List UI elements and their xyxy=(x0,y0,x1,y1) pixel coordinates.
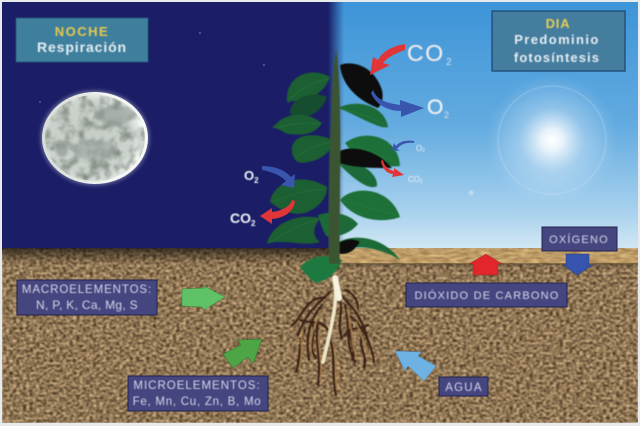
label: oxigeno xyxy=(542,227,617,251)
leaves xyxy=(267,73,400,283)
gas labels: CO xyxy=(230,210,251,226)
gas labels: 2 xyxy=(422,148,425,154)
label: agua: AGUA xyxy=(445,382,483,394)
arrow: dioxido de carbono xyxy=(469,254,502,275)
gas labels: 2 xyxy=(446,57,452,68)
panel: noche: Respiración xyxy=(37,39,127,55)
label: microelementos: MICROELEMENTOS: xyxy=(133,380,261,392)
panel: dia xyxy=(492,11,625,71)
gas arrows: night xyxy=(260,166,295,224)
gas labels: 2 xyxy=(251,219,256,228)
leaf midribs xyxy=(270,79,398,243)
sun xyxy=(468,74,618,206)
label: macroelementos: MACROELEMENTOS: xyxy=(22,284,152,296)
panel: dia: fotosíntesis xyxy=(514,50,600,65)
plant roots xyxy=(292,278,374,395)
label: oxigeno: OXÍGENO xyxy=(549,233,609,246)
label: macroelementos: N, P, K, Ca, Mg, S xyxy=(36,298,138,312)
gas labels: O xyxy=(416,144,422,153)
stem xyxy=(329,50,340,264)
gas labels xyxy=(230,40,452,228)
label: microelementos: Fe, Mn, Cu, Zn, B, Mo xyxy=(133,396,261,408)
gas labels: 2 xyxy=(444,110,449,120)
panel: noche xyxy=(16,18,148,62)
gas labels: CO xyxy=(407,40,445,66)
gas labels: O xyxy=(244,168,254,183)
plant xyxy=(267,50,400,283)
arrow: macroelementos xyxy=(182,286,225,310)
arrow: microelementos xyxy=(223,339,262,368)
soil xyxy=(2,248,638,423)
gas labels: 2 xyxy=(420,179,423,185)
gas labels: 2 xyxy=(254,176,259,185)
moon xyxy=(41,91,149,185)
heading: dia: DIA xyxy=(546,16,570,31)
night sky xyxy=(2,2,344,250)
label: agua xyxy=(439,377,488,396)
panel: dia: Predominio xyxy=(514,32,600,47)
gas arrows: day xyxy=(370,44,424,177)
label: macroelementos xyxy=(17,280,157,315)
black leaves xyxy=(336,63,392,254)
gas labels: O xyxy=(427,96,443,119)
label: microelementos xyxy=(128,376,268,411)
arrow: oxigeno xyxy=(563,254,593,275)
arrow: agua xyxy=(395,351,436,381)
gas labels: CO xyxy=(408,175,420,184)
heading: noche: NOCHE xyxy=(55,24,109,39)
day sky xyxy=(2,2,638,250)
label: dioxido de carbono xyxy=(406,283,567,307)
label: dioxido de carbono: DIÓXIDO DE CARBONO xyxy=(414,289,560,302)
